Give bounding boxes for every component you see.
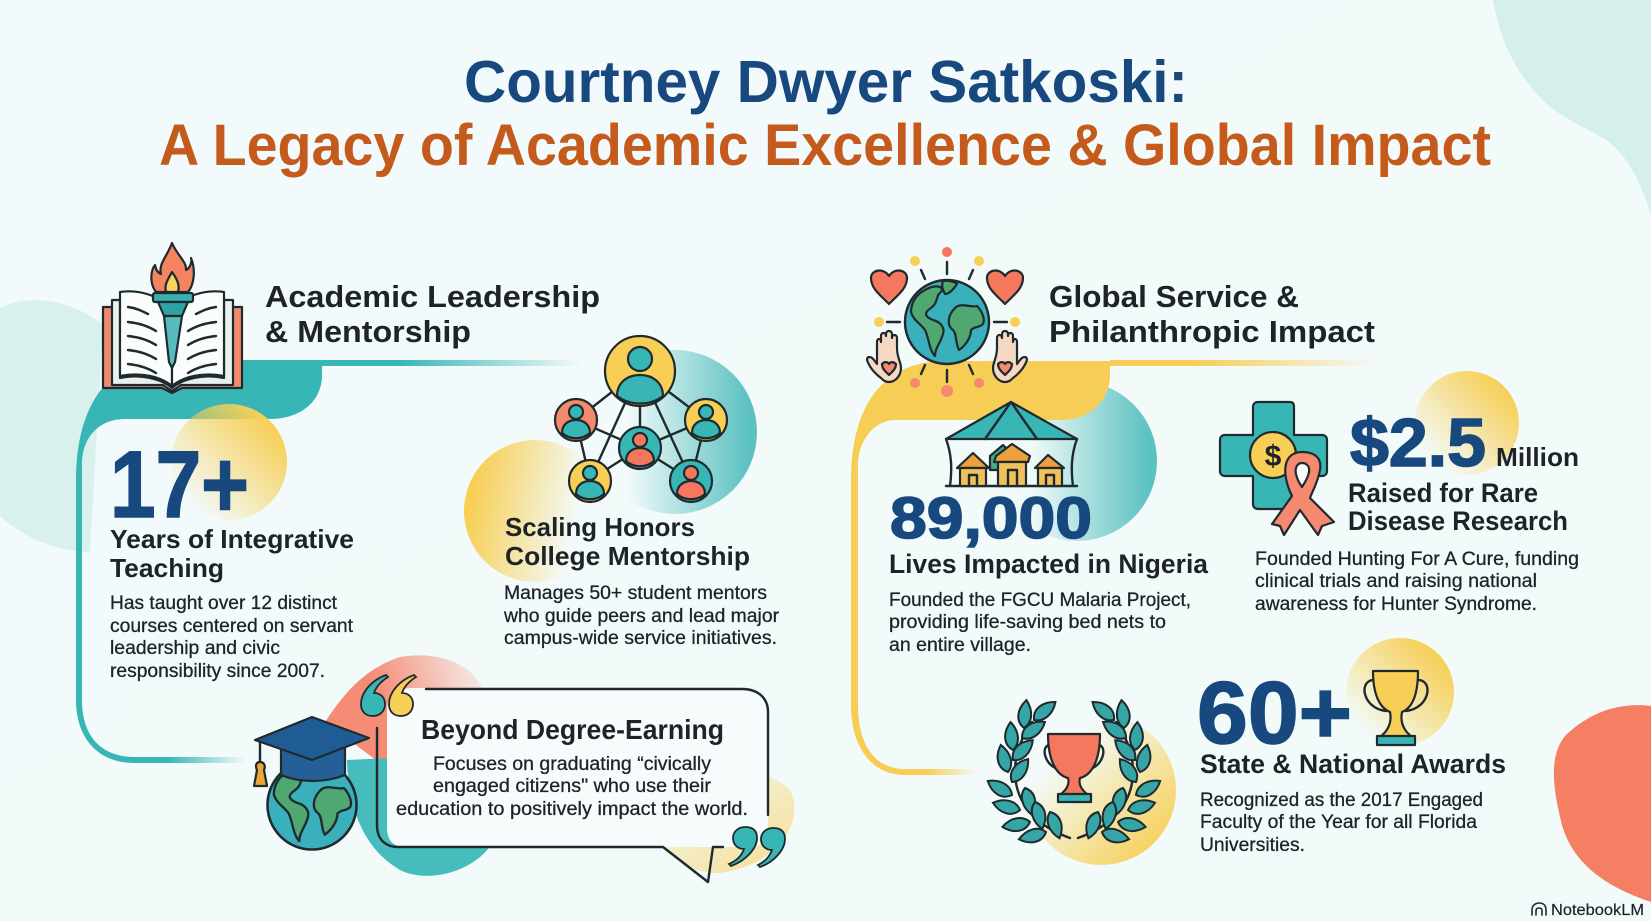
stat: $2.5 million: Raised for Rare: [1348, 478, 1538, 508]
stat: 89,000 lives: providing life-saving bed nets to: [889, 611, 1166, 633]
stat: 17+ years: leadership and civic: [110, 637, 280, 659]
stat: 17+ years: courses centered on servant: [110, 615, 354, 637]
stat: 17+ years: Teaching: [110, 553, 224, 583]
watermark: NotebookLM: NotebookLM: [1551, 902, 1644, 919]
stat: $2.5 million: Disease Research: [1348, 506, 1568, 536]
stat: $2.5 million: awareness for Hunter Syndrome.: [1255, 593, 1537, 615]
stat: 89,000 lives: 89,000: [890, 486, 1092, 551]
icon: open book with torch: [103, 243, 242, 393]
stat: $2.5 million: Million: [1496, 442, 1579, 472]
icon: graduation cap on globe: [254, 717, 369, 850]
blob: bottom right coral: [1554, 705, 1651, 902]
text: scaling honors college mentorship: Manages 50+ student mentors: [504, 582, 767, 604]
stat: 60+ awards: Recognized as the 2017 Engaged: [1200, 789, 1483, 811]
text: scaling honors college mentorship: [503, 512, 779, 649]
stat: 60+ awards: State & National Awards: [1200, 749, 1506, 779]
stat: 89,000 lives: [889, 402, 1209, 656]
heading: [1049, 279, 1375, 349]
panel: global service and philanthropic impact: [851, 247, 1579, 865]
stat: $2.5 million: clinical trials and raising national: [1255, 570, 1537, 592]
stat: 17+ years: 17+: [110, 432, 249, 538]
heading: Philanthropic Impact: [1049, 314, 1375, 349]
stat: 17+ years: responsibility since 2007.: [110, 660, 325, 682]
icon: laurel wreath with trophy: [984, 697, 1176, 865]
stat: 89,000 lives: an entire village.: [889, 634, 1031, 656]
stat: 17+ years: Years of Integrative: [110, 524, 354, 554]
teal frame: [76, 360, 582, 763]
text: scaling honors college mentorship: campus-wide service initiatives.: [504, 627, 777, 649]
stat: 60+ awards: Universities.: [1200, 834, 1305, 856]
heading: [265, 279, 600, 349]
blob: top right: [1493, 0, 1651, 215]
blob: left: [0, 300, 103, 552]
stat: 60+ awards: [1197, 638, 1506, 856]
stat: 17+ years: Has taught over 12 distinct: [110, 592, 338, 614]
heading: Global Service &: [1049, 279, 1299, 314]
callout: beyond degree-earning: education to positively impact the world.: [396, 798, 748, 820]
icon: mentor network: [464, 336, 757, 582]
panel: academic leadership and mentorship: [76, 243, 794, 882]
yellow frame: [851, 360, 1380, 775]
stat: 60+ awards: 60+: [1197, 663, 1352, 762]
stat: $2.5 million: $2.5: [1350, 405, 1486, 481]
icon: globe with hearts and hands: [867, 247, 1027, 397]
stat: $2.5 million: [1220, 371, 1579, 615]
title: Courtney Dwyer Satkoski:: [464, 49, 1188, 115]
title: [159, 49, 1491, 178]
callout: beyond degree-earning: engaged citizens" who use their: [433, 775, 712, 797]
heading: & Mentorship: [265, 314, 471, 349]
heading: Academic Leadership: [265, 279, 600, 314]
stat: 17+ years: [110, 404, 354, 682]
blob: teal behind village: [997, 381, 1157, 541]
stat: $2.5 million: Founded Hunting For A Cure, funding: [1255, 548, 1579, 570]
stat: $2.5 million: $: [1265, 440, 1282, 473]
stat: 89,000 lives: Founded the FGCU Malaria Project,: [889, 589, 1191, 611]
callout: beyond degree-earning: [325, 655, 794, 882]
text: scaling honors college mentorship: Scaling Honors: [505, 512, 695, 542]
stat: 60+ awards: Faculty of the Year for all Florida: [1200, 811, 1477, 833]
callout: beyond degree-earning: Focuses on graduating “civically: [433, 753, 711, 775]
text: scaling honors college mentorship: College Mentorship: [505, 541, 750, 571]
title: A Legacy of Academic Excellence & Global Impact: [159, 113, 1491, 178]
stat: 89,000 lives: Lives Impacted in Nigeria: [889, 549, 1209, 579]
text: scaling honors college mentorship: who guide peers and lead major: [503, 605, 779, 627]
callout: beyond degree-earning: Beyond Degree-Earning: [421, 714, 724, 745]
